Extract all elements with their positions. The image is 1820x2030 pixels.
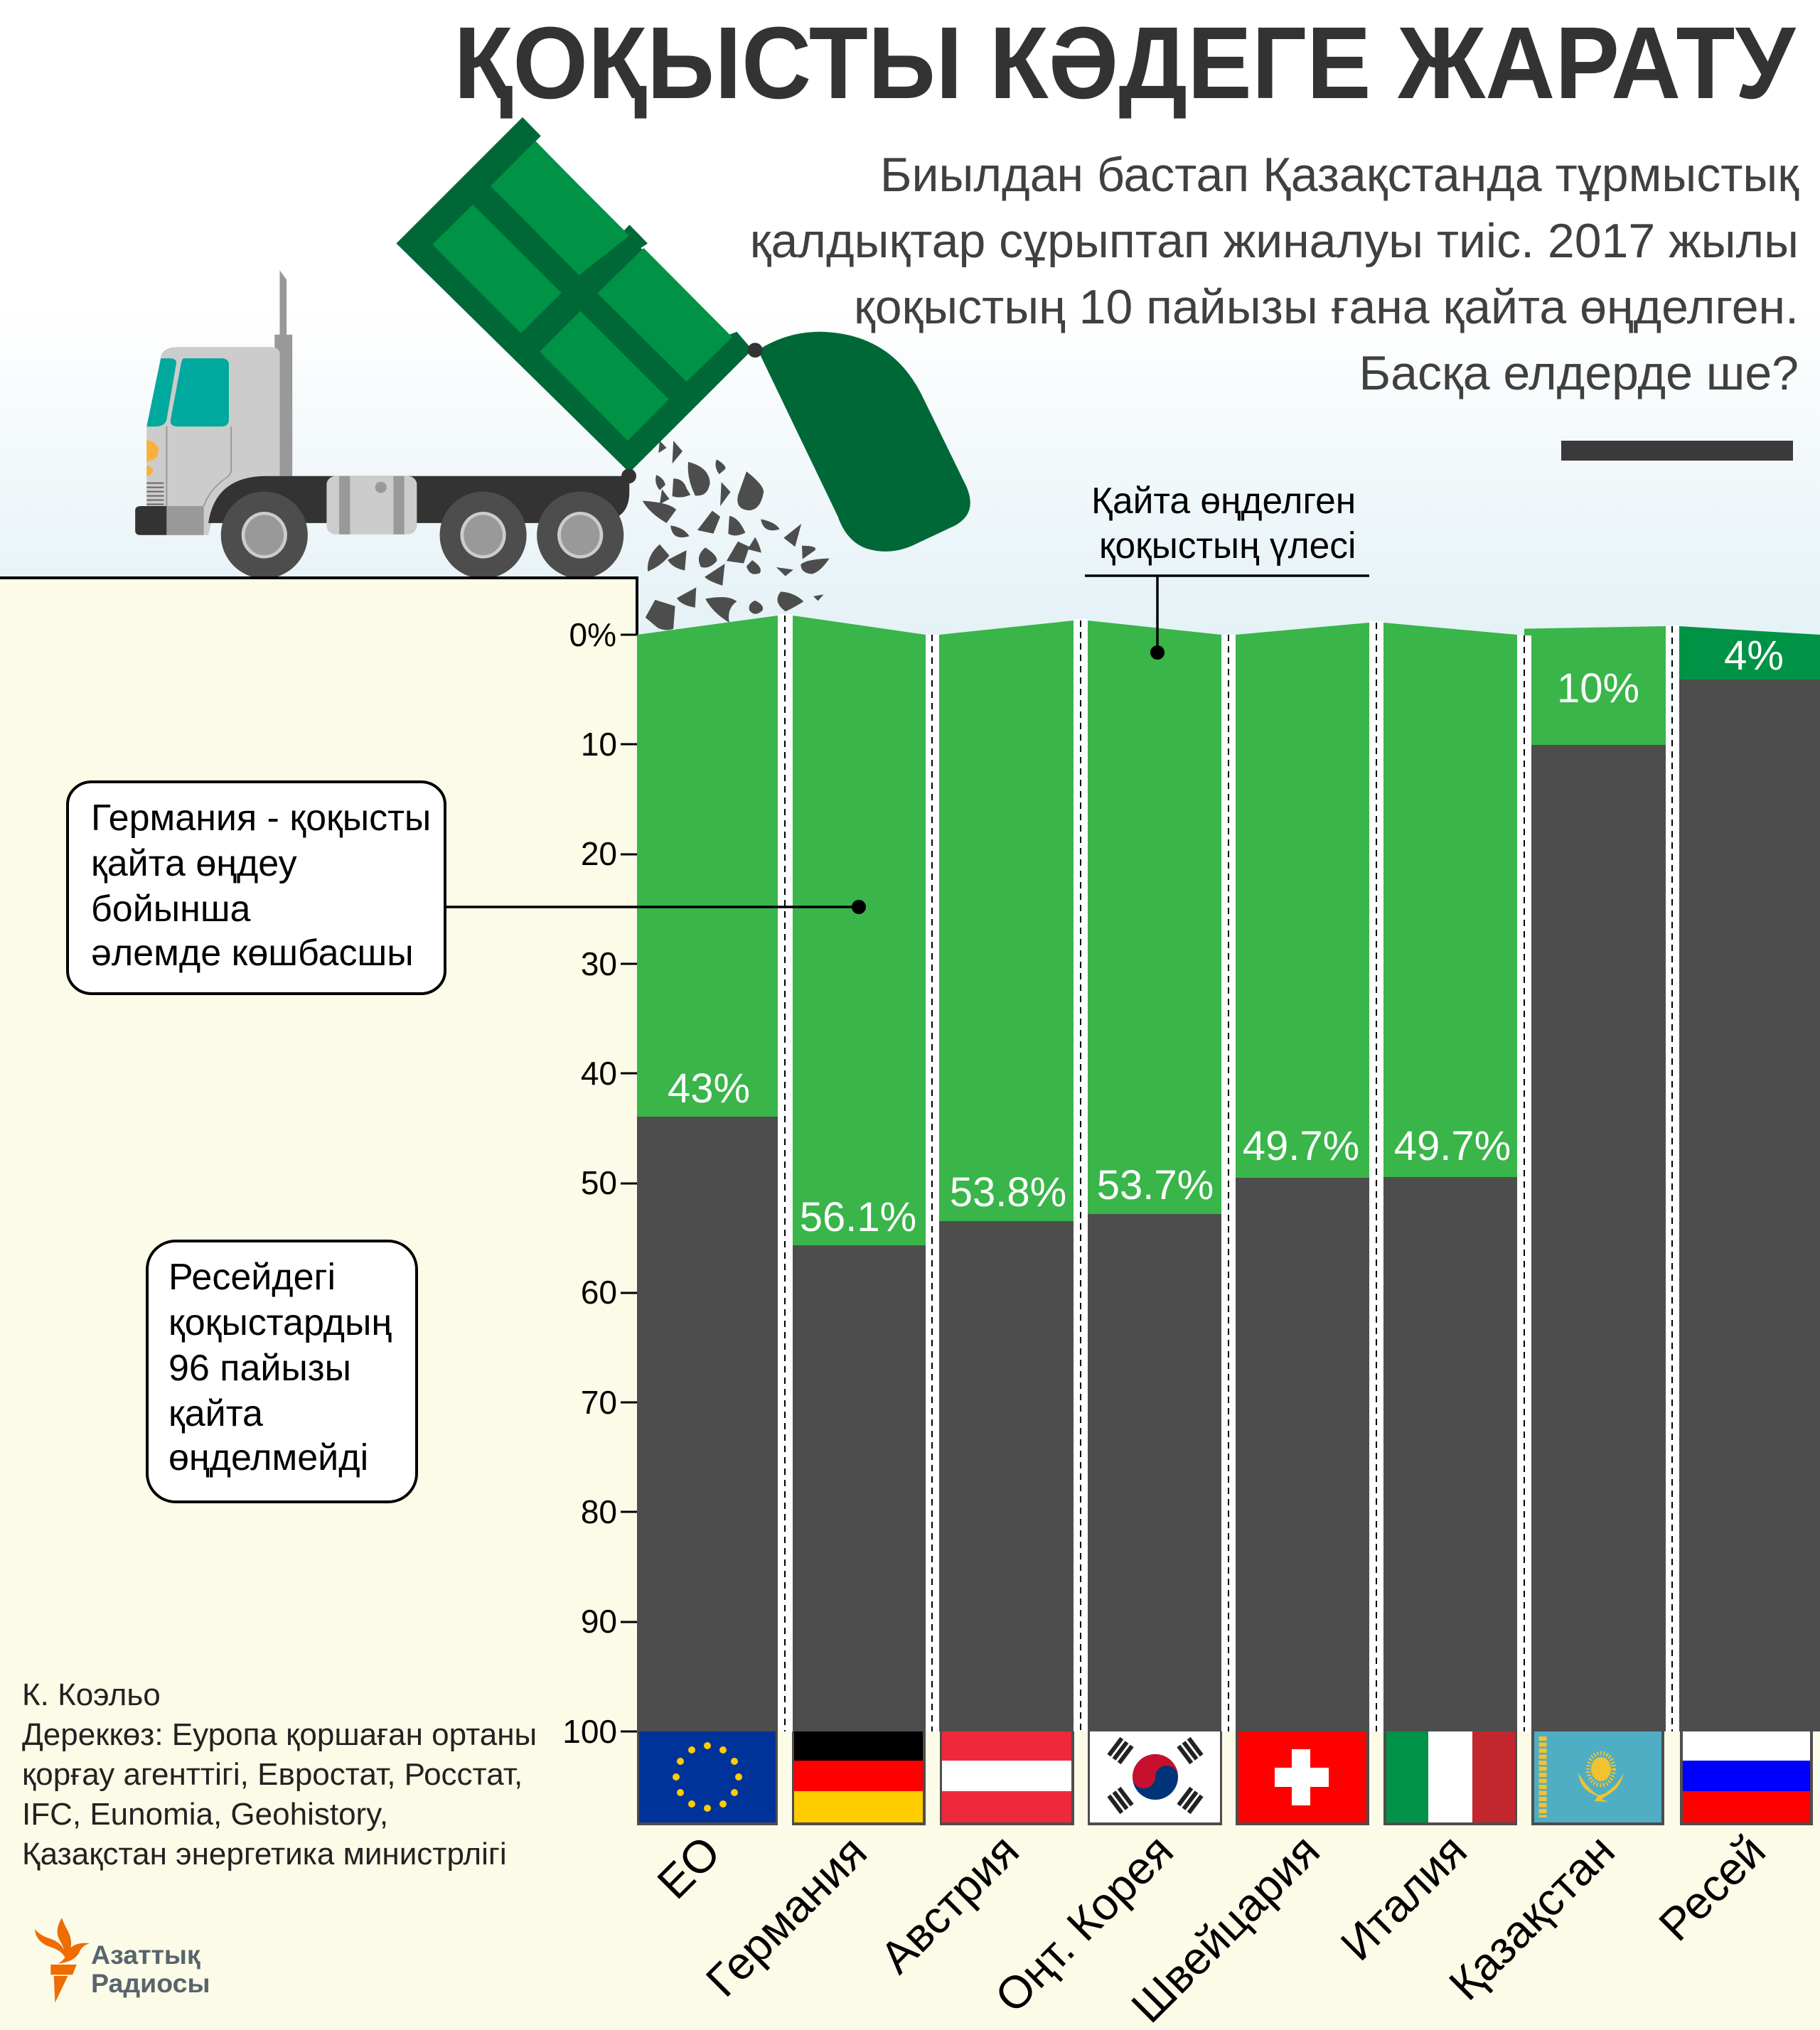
callout: Germany: Германия - қоқысты xyxy=(91,798,431,839)
callout: Russia xyxy=(147,1241,417,1502)
country labels: Швейцария xyxy=(1121,1825,1329,2030)
country labels: Италия xyxy=(1331,1825,1477,1970)
intro text: Биылдан бастап Қазақстанда тұрмыстық xyxy=(880,148,1799,202)
icon: torch xyxy=(35,1918,90,2003)
legend annotation: recycled share: қоқыстың үлесі xyxy=(1099,525,1356,566)
callout: Germany: қайта өңдеу xyxy=(91,843,297,884)
y axis: 80 xyxy=(581,1493,617,1530)
bar: Switzerland xyxy=(1236,623,1369,1731)
value labels: 49.7% xyxy=(1394,1123,1511,1169)
country labels: Австрия xyxy=(870,1825,1029,1983)
source credits: қорғау агенттігі, Евростат, Росстат, xyxy=(22,1757,523,1792)
flags row xyxy=(637,1731,1813,1825)
value labels: 53.7% xyxy=(1097,1162,1214,1208)
callout: Russia: қоқыстардың xyxy=(168,1302,392,1343)
callout: Russia: өңделмейді xyxy=(168,1437,368,1478)
icon: dump gate xyxy=(758,332,970,552)
icon: fuel tank xyxy=(326,476,417,535)
intro text: қалдықтар сұрыптап жиналуы тиіс. 2017 жылы xyxy=(750,214,1799,268)
country labels xyxy=(648,1825,1775,2030)
bar: Austria xyxy=(939,621,1074,1731)
value labels: 56.1% xyxy=(800,1194,916,1240)
country labels: Ресей xyxy=(1649,1825,1775,1950)
y axis: 0% xyxy=(569,616,616,653)
bar: South Korea xyxy=(1088,621,1221,1731)
value labels: 4% xyxy=(1724,633,1784,679)
y axis: 90 xyxy=(581,1603,617,1640)
icon: falling waste pieces xyxy=(643,441,830,630)
value labels: 49.7% xyxy=(1243,1123,1359,1169)
icon: truck cab xyxy=(135,347,279,535)
source credits: IFC, Eunomia, Geohistory, xyxy=(22,1797,388,1832)
country labels: Оңт. Корея xyxy=(985,1825,1183,2022)
country labels: Қазақстан xyxy=(1439,1825,1624,2010)
y axis: 50 xyxy=(581,1164,617,1201)
logo: Azattyq Radio: Азаттық xyxy=(91,1940,200,1970)
y axis: 20 xyxy=(581,835,617,872)
bar: Italy xyxy=(1383,623,1517,1731)
flag: South Korea xyxy=(1088,1731,1222,1825)
source credits: Қазақстан энергетика министрлігі xyxy=(22,1837,507,1871)
value labels: 43% xyxy=(668,1065,750,1112)
intro text: қоқыстың 10 пайызы ғана қайта өңделген. xyxy=(854,280,1799,334)
icon: exhaust pipe xyxy=(274,270,292,476)
intro text xyxy=(750,148,1799,400)
y axis: 30 xyxy=(581,945,617,982)
icon: hinges xyxy=(621,343,763,483)
bar: Russia xyxy=(1679,626,1820,1731)
y axis: 60 xyxy=(581,1274,617,1311)
flag: Germany xyxy=(792,1731,926,1825)
flag: Austria xyxy=(940,1731,1074,1825)
bar: Germany xyxy=(793,616,926,1731)
bar: Kazakhstan xyxy=(1524,626,1666,1731)
flag: EU xyxy=(637,1731,778,1825)
source credits: К. Коэльо xyxy=(22,1677,161,1712)
source credits xyxy=(22,1677,537,1871)
flag: Italy xyxy=(1383,1731,1517,1825)
y axis: 40 xyxy=(581,1055,617,1092)
value labels: 53.8% xyxy=(950,1169,1066,1215)
legend annotation: recycled share: Қайта өңделген xyxy=(1091,480,1356,521)
accent bar xyxy=(1561,441,1793,461)
logo: Azattyq Radio xyxy=(35,1918,210,2003)
chart: recycled share stacked bars xyxy=(637,616,1820,1731)
callout: Germany: бойынша xyxy=(91,888,251,930)
y axis xyxy=(562,616,637,1750)
callout: Russia: Ресейдегі xyxy=(168,1257,336,1298)
country labels: Германия xyxy=(696,1826,877,2007)
callout: Germany: әлемде көшбасшы xyxy=(91,933,414,974)
logo: Azattyq Radio: Радиосы xyxy=(91,1968,210,1998)
intro text: Басқа елдерде ше? xyxy=(1359,346,1799,400)
callout: Germany xyxy=(68,782,866,994)
country labels: ЕО xyxy=(648,1826,730,1908)
icon: truck chassis xyxy=(208,476,629,523)
y axis: 100 xyxy=(562,1713,617,1750)
bar: EU xyxy=(637,616,778,1731)
legend annotation: recycled share xyxy=(1085,480,1369,660)
source credits: Дереккөз: Еуропа қоршаған ортаны xyxy=(22,1717,537,1752)
icon: raised dump body xyxy=(396,117,752,473)
flag: Kazakhstan xyxy=(1531,1731,1664,1825)
icon: wheels xyxy=(221,492,623,579)
illustration: garbage truck xyxy=(135,117,970,630)
y axis: 70 xyxy=(581,1384,617,1421)
ground line xyxy=(0,578,637,635)
title: ҚОҚЫСТЫ КӘДЕГЕ ЖАРАТУ xyxy=(454,5,1797,120)
callout: Russia: 96 пайызы xyxy=(168,1348,351,1389)
y axis: 10 xyxy=(581,726,617,763)
callout: Russia: қайта xyxy=(168,1393,263,1434)
flag: Russia xyxy=(1680,1731,1813,1825)
value labels: 10% xyxy=(1557,665,1639,711)
flag: Switzerland xyxy=(1236,1731,1369,1825)
value labels xyxy=(668,633,1784,1240)
